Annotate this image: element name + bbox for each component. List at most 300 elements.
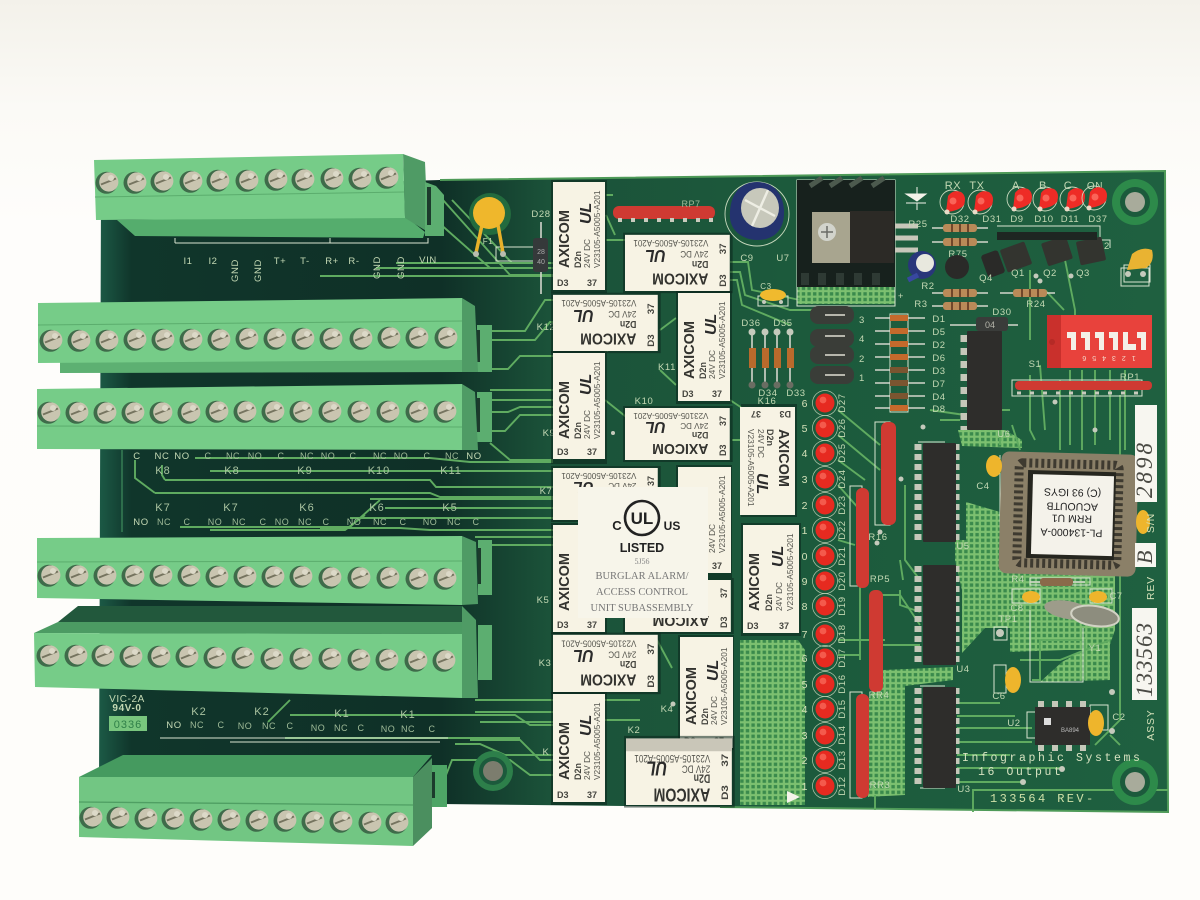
board title text: 133564 REV- [990,792,1096,806]
top resistors: R3 [914,299,928,310]
diode D28: 28 [537,249,545,256]
relay K15 upright: 24V DC [774,582,784,611]
relay K10 horizontal: UL [645,418,666,435]
middle terminal silkscreen labels: C [400,517,406,527]
lower terminal silkscreen labels: C [218,720,224,730]
relay K16 inverted [740,404,797,517]
relay top row horizontal: 37 [718,243,728,254]
relay K10 horizontal: V23105-A5005-A201 [633,411,708,420]
jumper headers: 2 [859,354,865,365]
UL listed label: ACCESS CONTROL [596,587,688,598]
status LEDs: D31 [982,214,1002,225]
UL listed label [578,487,708,618]
relay K2 horizontal: V23105-A5005-A201 [634,752,710,764]
relay K1 upright: V23105-A5005-A201 [592,702,602,780]
output LED column: D21 [837,546,848,566]
resistor network RP1 [1015,381,1152,393]
capacitor C3: C3 [760,282,772,291]
silkscreen: K labels near relays: K5 [537,595,549,606]
DIP switch S1 [1029,315,1152,383]
relay K12 horizontal: 24V DC [608,309,636,319]
middle terminal silkscreen labels: NO [347,517,361,527]
silkscreen: K labels near relays [537,322,776,758]
diode array D1 to D8: D3 [932,366,946,377]
status LEDs: D11 [1061,214,1079,225]
relay K9 upright: D2n [573,422,583,439]
relay K6 horizontal: D3 [719,616,729,628]
UL listed label: UL [631,509,653,528]
resistor networks vertical [856,422,896,798]
relay K5 upright [551,523,607,634]
relay K1 upright: D3 [557,790,569,800]
relay K11 upright: AXICOM [682,321,698,379]
UL listed label: UNIT SUBASSEMBLY [591,603,694,614]
diode symbol top [906,187,926,210]
revision tag [1132,543,1157,567]
diode array D1 to D8 [875,314,946,415]
relay K16 inverted: UL [753,473,770,494]
IC U3: U3 [957,784,971,795]
relay K7 horizontal: D2n [620,490,636,500]
middle terminal silkscreen labels: NO [394,451,408,461]
transistors Q1 to Q4 [945,232,1110,284]
chip label: PL-134000-A [1040,525,1103,539]
relay K9 upright: D3 [557,447,569,457]
lower terminal silkscreen labels: NO [238,721,252,731]
silkscreen: K labels near relays: K3 [539,658,551,669]
middle terminal silkscreen labels: C [472,517,480,527]
relay K7 horizontal: 37 [646,476,656,486]
middle terminal silkscreen labels: K7 [155,502,171,514]
IC U2: BA894 [1061,728,1080,734]
silkscreen: K labels near relays: K9 [543,428,555,439]
top terminal silkscreen labels: T- [300,256,310,267]
capacitor top right [1121,249,1153,286]
relay K3 horizontal: 37 [646,644,656,655]
relay K top left: UL [578,203,595,224]
output LED column [802,390,848,798]
middle terminal silkscreen labels: C [278,451,284,461]
chip label: ACUOUTB [1046,499,1098,513]
output LED column: D19 [837,596,848,616]
relay K7 horizontal [551,466,661,522]
middle terminal silkscreen labels: NO [466,451,482,462]
relay K12 horizontal: D3 [646,334,656,347]
resistor network RP7 [613,199,715,220]
middle terminal silkscreen labels: K8 [224,465,240,477]
lower terminal silkscreen labels: NO [166,720,182,731]
relay K7 horizontal: AXICOM [580,500,636,516]
status LEDs [940,180,1108,225]
relay K4 upright: D2n [700,708,710,725]
DIP switch S1: RP1 [1120,372,1140,383]
middle terminal silkscreen labels: NC [445,451,459,461]
relay K11 upright: 24V DC [707,350,717,379]
assembly number tag: 133563 [1132,622,1157,697]
relay K3 horizontal [551,633,661,694]
small yellow capacitors: C4 [976,481,990,492]
output LED column: D16 [837,674,848,694]
date code box [109,716,147,731]
relay K16 inverted: V23105-A5005-A201 [746,429,756,507]
output LED column: 7 [802,629,808,641]
relay K16 inverted: AXICOM [775,429,791,487]
lower terminal silkscreen labels: K1 [334,708,350,720]
relay K10 horizontal [623,406,733,462]
top resistors: R2 [921,281,935,292]
middle terminal silkscreen labels: C [322,517,330,527]
relay K16 inverted: 24V DC [756,429,766,458]
UL listed label: BURGLAR ALARM/ [595,571,689,582]
PLCC socket U1 with label [998,451,1139,577]
relay K11 upright: V23105-A5005-A201 [717,301,727,379]
relay K15 upright: D3 [747,621,759,631]
top terminal silkscreen labels: I1 [183,256,193,267]
capacitor C10 small electrolytic [898,251,936,302]
top terminal silkscreen labels: GND [396,256,407,279]
relay K1 upright: 37 [587,790,597,800]
middle terminal silkscreen labels: K9 [297,465,313,477]
relay K2 horizontal [624,736,735,808]
output LED column: D25 [837,443,848,463]
status LEDs: D32 [950,214,970,225]
fuse F1 [469,193,511,257]
mounting hole bottom left [473,751,513,791]
terminal block connector 5 [34,606,492,698]
relay K5 upright: D3 [557,620,569,630]
middle terminal silkscreen labels: C [260,517,266,527]
relay K9 upright: 37 [587,447,597,457]
relay K11 upright: UL [703,314,720,335]
output LED column: D22 [837,520,848,540]
relay top row horizontal: UL [645,246,666,265]
relay K1 upright: 24V DC [582,751,592,780]
middle terminal silkscreen labels: NO [423,517,437,527]
relay K9 upright: UL [578,374,595,395]
capacitor C9: C9 [740,253,754,264]
relay K1 upright: D2n [573,763,583,780]
lower terminal silkscreen labels: VIC-2A [109,694,145,705]
transistors Q1 to Q4: Q4 [979,273,993,284]
small yellow capacitors: C8 [1010,603,1024,614]
middle terminal silkscreen labels: K5 [442,502,458,514]
relay K7 horizontal: 24V DC [608,481,636,490]
middle terminal silkscreen labels: NO [248,451,262,461]
relay K1 upright [551,692,607,805]
silkscreen: K labels near relays: K2 [628,725,640,736]
relay K1 upright: AXICOM [557,722,573,780]
relay K12 horizontal: D2n [620,319,636,329]
diode array D1 to D8: D1 [932,314,946,325]
relay top row horizontal [623,233,733,293]
relay K7 horizontal: UL [573,478,594,495]
middle terminal silkscreen labels: K6 [299,502,315,514]
transistors Q1 to Q4: Q1 [1011,268,1025,279]
status LEDs: B [1039,180,1047,192]
terminal block connector 2 [38,298,492,373]
IC U5: U5 [956,541,970,552]
chip label: (C) 93 IGYS [1044,485,1101,499]
lower terminal silkscreen labels: C [286,721,294,731]
serial number tag: 2898 [1132,440,1157,498]
middle terminal silkscreen labels: K11 [440,465,462,477]
middle terminal silkscreen labels: NO [321,451,335,461]
relay K8 upright [676,465,732,578]
capacitor C9: U7 [776,253,790,264]
IC U2 [1007,704,1090,748]
top terminal silkscreen labels [183,255,437,282]
lower terminal silkscreen labels: NO [381,724,395,734]
relay K16 inverted: D2n [765,429,775,446]
silkscreen: K labels near relays: K10 [635,396,653,407]
output LED column: 6 [802,653,808,665]
output LED column: 5 [802,679,808,691]
IC U3 [918,687,971,795]
lower terminal silkscreen labels: NC [334,723,348,733]
IC U6: U6 [997,429,1011,440]
top resistors: R25 [908,219,928,230]
diode array D1 to D8: D8 [932,404,946,415]
output LED column: 2 [802,500,808,512]
output LED column: 3 [802,730,808,742]
small yellow capacitors: R4 [1011,574,1025,585]
IC U4: U4 [956,664,970,675]
relay K2 horizontal: D2n [694,771,710,783]
jumper headers: 4 [859,334,865,345]
relay K11 upright: D2n [698,362,708,379]
output LED column: D27 [837,393,848,413]
output LED column: D14 [837,725,848,745]
crystal Y1: Y1 [1089,643,1101,654]
relay K12 horizontal [551,293,661,353]
relay K9 upright [551,351,607,464]
relay K10 horizontal: D2n [692,430,708,440]
relay K4 upright: V23105-A5005-A201 [719,647,729,725]
top terminal silkscreen labels: VIN [419,255,437,266]
test point TP1 [994,614,1018,640]
UL listed label: LISTED [620,541,664,555]
relay K6 horizontal: AXICOM [652,612,709,628]
output LED column: D13 [837,750,848,770]
lower terminal silkscreen labels: NC [401,724,415,734]
lower terminal silkscreen labels: K2 [254,706,270,718]
capacitor C9 [725,182,790,264]
relay K11 upright: D3 [682,389,694,399]
left board edge strip line [121,450,123,532]
relay K1 upright: UL [578,715,595,736]
relay top row horizontal: D3 [718,274,728,287]
diode array D1 to D8: D4 [932,392,946,403]
relay K15 upright: AXICOM [747,553,763,611]
relay K2 horizontal: 24V DC [682,762,710,774]
relay K2 horizontal: UL [646,757,667,781]
resistor networks vertical: RR3 [870,780,890,791]
circuit board [34,154,1168,846]
relay top row horizontal: 24V DC [680,249,708,259]
relay K3 horizontal: D3 [646,675,656,688]
chip label [1031,474,1114,556]
capacitor C3 [758,282,788,306]
relay K12 horizontal: 37 [646,303,656,314]
crystal Y1 [1043,597,1120,654]
output LED column: 8 [802,601,808,613]
lower terminal silkscreen labels: NC [262,721,276,731]
relay K9 upright: V23105-A5005-A201 [592,361,602,439]
middle terminal silkscreen labels: NC [298,517,312,527]
output LED column: 4 [802,448,808,460]
capacitor C10 small electrolytic: + [898,291,904,302]
relay K15 upright: D2n [764,594,774,611]
output LED column: D23 [837,495,848,515]
diode D28: 40 [537,259,545,266]
middle terminal silkscreen labels: C [424,451,430,461]
DIP switch S1: S1 [1029,359,1041,370]
jumper headers: 3 [859,315,865,326]
small yellow capacitors [976,455,1150,736]
board title text: Infographic Systems [962,752,1143,765]
relay K top left [551,180,607,293]
relay K15 upright: V23105-A5005-A201 [785,533,795,611]
output LED column: 1 [802,525,808,537]
relay K15 upright [741,523,801,636]
silkscreen: K labels near relays: K4 [661,704,673,715]
silkscreen S/N REV ASSY [1145,513,1157,741]
output LED column: 4 [802,704,808,716]
DIP switch S1: 123456 [1076,354,1136,361]
voltage regulator U7 with heatsink [797,178,918,287]
relay K top left: V23105-A5005-A201 [592,190,602,268]
relay K7 horizontal: V23105-A5005-A201 [561,471,636,480]
relay top row horizontal: V23105-A5005-A201 [633,238,708,249]
middle terminal silkscreen labels: K10 [368,465,390,477]
relay K8 upright: 24V DC [707,524,717,553]
top terminal silkscreen labels: R- [348,256,360,267]
output LED column: D15 [837,699,848,719]
transistors Q1 to Q4: Q2 [1043,268,1057,279]
relay K9 upright: 24V DC [582,410,592,439]
relay K4 upright: 37 [714,736,724,746]
middle terminal silkscreen labels: NC [226,451,240,461]
terminal block connector 3 [37,384,492,450]
silkscreen: K labels near relays: K11 [658,362,676,373]
relay K2 horizontal: 37 [721,753,730,767]
relay K5 upright: AXICOM [557,553,573,611]
relay K15 upright: 37 [779,621,789,631]
silkscreen S/N REV ASSY: ASSY [1145,709,1157,741]
board title text: 16 Output [978,766,1064,779]
middle terminal silkscreen labels [133,451,482,528]
resistor network RP7: RP7 [681,199,701,209]
relay K top left: 24V DC [582,239,592,268]
middle terminal silkscreen labels: NC [155,451,169,462]
relay K7 horizontal: D3 [646,504,656,516]
diode symbol bottom [787,791,800,803]
serial number tag [1132,405,1157,502]
diodes D33 to D36 [741,318,806,399]
board title text [962,752,1143,806]
relay K3 horizontal: 24V DC [608,649,636,660]
middle terminal silkscreen labels: C [184,517,190,527]
middle terminal silkscreen labels: NC [232,517,246,527]
lower terminal silkscreen labels: NC [190,720,204,730]
silkscreen S/N REV ASSY: S/N [1145,513,1157,533]
small yellow capacitors: C7 [1109,591,1123,602]
IC U4 [918,565,970,675]
diode D30 [950,307,1018,331]
middle terminal silkscreen labels: NO [133,517,149,528]
relay K8 upright: V23105-A5005-A201 [717,475,727,553]
relay top row horizontal: D2n [692,259,708,269]
relay K3 horizontal: D2n [620,659,636,670]
diode array D1 to D8: D5 [932,327,946,338]
mounting hole top right [1112,179,1158,225]
diodes D33 to D36: D35 [773,318,793,329]
relay K2 horizontal: D3 [721,785,730,800]
output LED column: 9 [802,576,808,588]
relay K4 upright: AXICOM [684,667,700,725]
IC U6 [964,331,1011,440]
relay K16 inverted: D3 [779,409,791,419]
relay K3 horizontal: V23105-A5005-A201 [561,638,636,649]
relay K top left: D3 [557,278,569,288]
lower terminal silkscreen labels [109,694,436,734]
copper traces [135,195,1168,812]
output LED column: D24 [837,469,848,489]
lower terminal silkscreen labels: NO [311,723,325,733]
transistors Q1 to Q4: 2 [1104,241,1110,252]
top resistors: R75 [948,249,968,260]
top resistors: R24 [1026,299,1046,310]
diodes D33 to D36: D34 [758,388,778,399]
output LED column: 1 [802,781,808,793]
UL listed label: US [664,519,680,533]
lower terminal silkscreen labels: 94V-0 [112,703,142,714]
middle terminal silkscreen labels: NO [208,517,222,527]
small yellow capacitors: C6 [992,691,1006,702]
relay K4 upright: UL [705,660,722,681]
middle terminal silkscreen labels: NC [300,451,314,461]
status LEDs: ON [1087,181,1103,192]
middle terminal silkscreen labels: NC [447,517,461,527]
relay K11 upright [676,291,732,404]
silkscreen S/N REV ASSY: REV [1145,576,1157,600]
status LEDs: TX [969,180,985,192]
output LED column: 6 [802,398,808,410]
diodes D33 to D36: D33 [786,388,806,399]
diode D30: 04 [985,320,995,330]
status LEDs: D37 [1088,214,1108,225]
resistor networks vertical: RR4 [869,690,889,701]
relay K16 inverted: 37 [751,409,761,419]
relay K top left: AXICOM [557,210,573,268]
output LED column: D26 [837,418,848,438]
top resistors [908,219,1055,310]
terminal block connector 6 bottom [79,755,447,846]
middle terminal silkscreen labels: K8 [155,465,171,477]
relay K10 horizontal: AXICOM [652,440,708,456]
status LEDs: RX [945,180,961,192]
output LED column: 5 [802,423,808,435]
mounting hole bottom right [1112,759,1158,805]
relay K3 horizontal: AXICOM [580,670,636,688]
middle terminal silkscreen labels: K6 [369,502,385,514]
lower terminal silkscreen labels: C [428,724,436,734]
relay K4 upright [678,635,734,750]
relay K4 upright: 24V DC [709,696,719,725]
top terminal silkscreen labels: R+ [325,256,339,267]
relay K10 horizontal: 24V DC [680,421,708,430]
relay K6 horizontal: 37 [719,588,729,598]
